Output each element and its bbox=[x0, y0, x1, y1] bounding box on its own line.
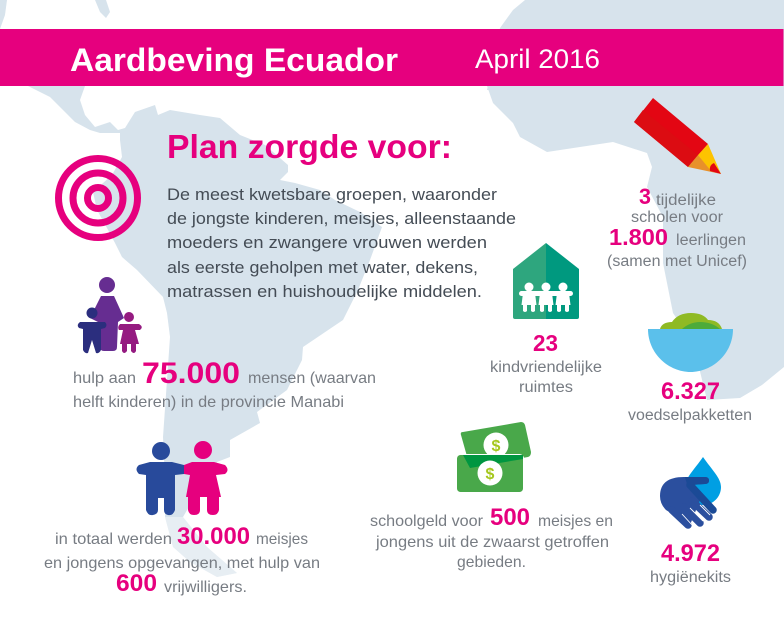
icon: banknotes bbox=[456, 422, 531, 492]
stat: 3 scholen, 1.800 leerlingen: 1.800 bbox=[609, 224, 668, 250]
stat: 30.000 meisjes en jongens: in totaal werden bbox=[55, 531, 172, 548]
stat: 6.327 voedselpakketten: 6.327 bbox=[661, 378, 720, 405]
stat: 4.972 hygiënekits: hygiënekits bbox=[650, 569, 731, 586]
stat: 30.000 meisjes en jongens bbox=[44, 523, 320, 597]
stat: 500 meisjes en jongens bbox=[370, 504, 613, 571]
intro text: moeders en zwangere vrouwen werden bbox=[167, 233, 487, 252]
stat: 3 scholen, 1.800 leerlingen: (samen met Unicef) bbox=[607, 253, 747, 270]
icon: pencil bbox=[634, 98, 721, 174]
icon: hand and water drop bbox=[660, 457, 721, 526]
stat: 30.000 meisjes en jongens: meisjes bbox=[256, 531, 308, 548]
stat: 23 ruimtes: ruimtes bbox=[519, 379, 573, 396]
intro text: de jongste kinderen, meisjes, alleenstaande bbox=[167, 209, 516, 228]
icon: child friendly house bbox=[513, 243, 579, 319]
stat: 23 ruimtes: 23 bbox=[533, 330, 558, 356]
icon: boy and girl bbox=[136, 441, 228, 515]
stat: 23 ruimtes: kindvriendelijke bbox=[490, 359, 602, 376]
icon: food bowl bbox=[648, 313, 733, 372]
icon: target bbox=[58, 158, 138, 238]
stat: 75.000 mensen: mensen (waarvan bbox=[248, 370, 376, 387]
stat: 4.972 hygiënekits: 4.972 bbox=[661, 540, 720, 567]
icon: banknotes: $ bbox=[486, 466, 495, 483]
stat: 500 meisjes en jongens: jongens uit de zwaarst getroffen bbox=[375, 534, 609, 551]
stat: 6.327 voedselpakketten: voedselpakketten bbox=[628, 407, 752, 424]
icon: family bbox=[78, 277, 142, 353]
intro text: als eerste geholpen met water, dekens, bbox=[167, 258, 478, 277]
intro text: De meest kwetsbare groepen, waaronder bbox=[167, 185, 497, 204]
stat: 23 ruimtes bbox=[490, 330, 602, 396]
icon: banknotes: $ bbox=[492, 438, 501, 455]
stat: 500 meisjes en jongens: schoolgeld voor bbox=[370, 513, 484, 530]
stat: 30.000 meisjes en jongens: 30.000 bbox=[177, 523, 250, 550]
stat: 30.000 meisjes en jongens: en jongens opgevangen, met hulp van bbox=[44, 555, 320, 572]
date: April 2016 bbox=[475, 44, 600, 74]
stat: 75.000 mensen: hulp aan bbox=[73, 370, 136, 387]
header band bbox=[0, 29, 784, 86]
heading: Plan zorgde voor: bbox=[167, 128, 452, 165]
stat: 75.000 mensen: helft kinderen) in de provincie Manabi bbox=[73, 394, 344, 411]
stat: 3 scholen, 1.800 leerlingen: tijdelijke bbox=[656, 192, 716, 209]
stat: 500 meisjes en jongens: gebieden. bbox=[457, 554, 526, 571]
stat: 75.000 mensen bbox=[73, 357, 376, 411]
stat: 30.000 meisjes en jongens: 600 bbox=[116, 570, 157, 597]
stat: 500 meisjes en jongens: 500 bbox=[490, 504, 530, 531]
stat: 6.327 voedselpakketten bbox=[628, 378, 752, 424]
intro text bbox=[167, 185, 516, 301]
title: Aardbeving Ecuador bbox=[70, 42, 398, 78]
stat: 30.000 meisjes en jongens: vrijwilligers. bbox=[164, 579, 247, 596]
intro text: matrassen en huishoudelijke middelen. bbox=[167, 282, 482, 301]
stat: 3 scholen, 1.800 leerlingen: 3 bbox=[639, 184, 651, 209]
stat: 3 scholen, 1.800 leerlingen bbox=[607, 184, 747, 270]
stat: 3 scholen, 1.800 leerlingen: leerlingen bbox=[676, 232, 746, 249]
stat: 500 meisjes en jongens: meisjes en bbox=[538, 513, 613, 530]
stat: 75.000 mensen: 75.000 bbox=[142, 357, 240, 390]
stat: 4.972 hygiënekits bbox=[650, 540, 731, 586]
stat: 3 scholen, 1.800 leerlingen: scholen voor bbox=[631, 209, 723, 226]
